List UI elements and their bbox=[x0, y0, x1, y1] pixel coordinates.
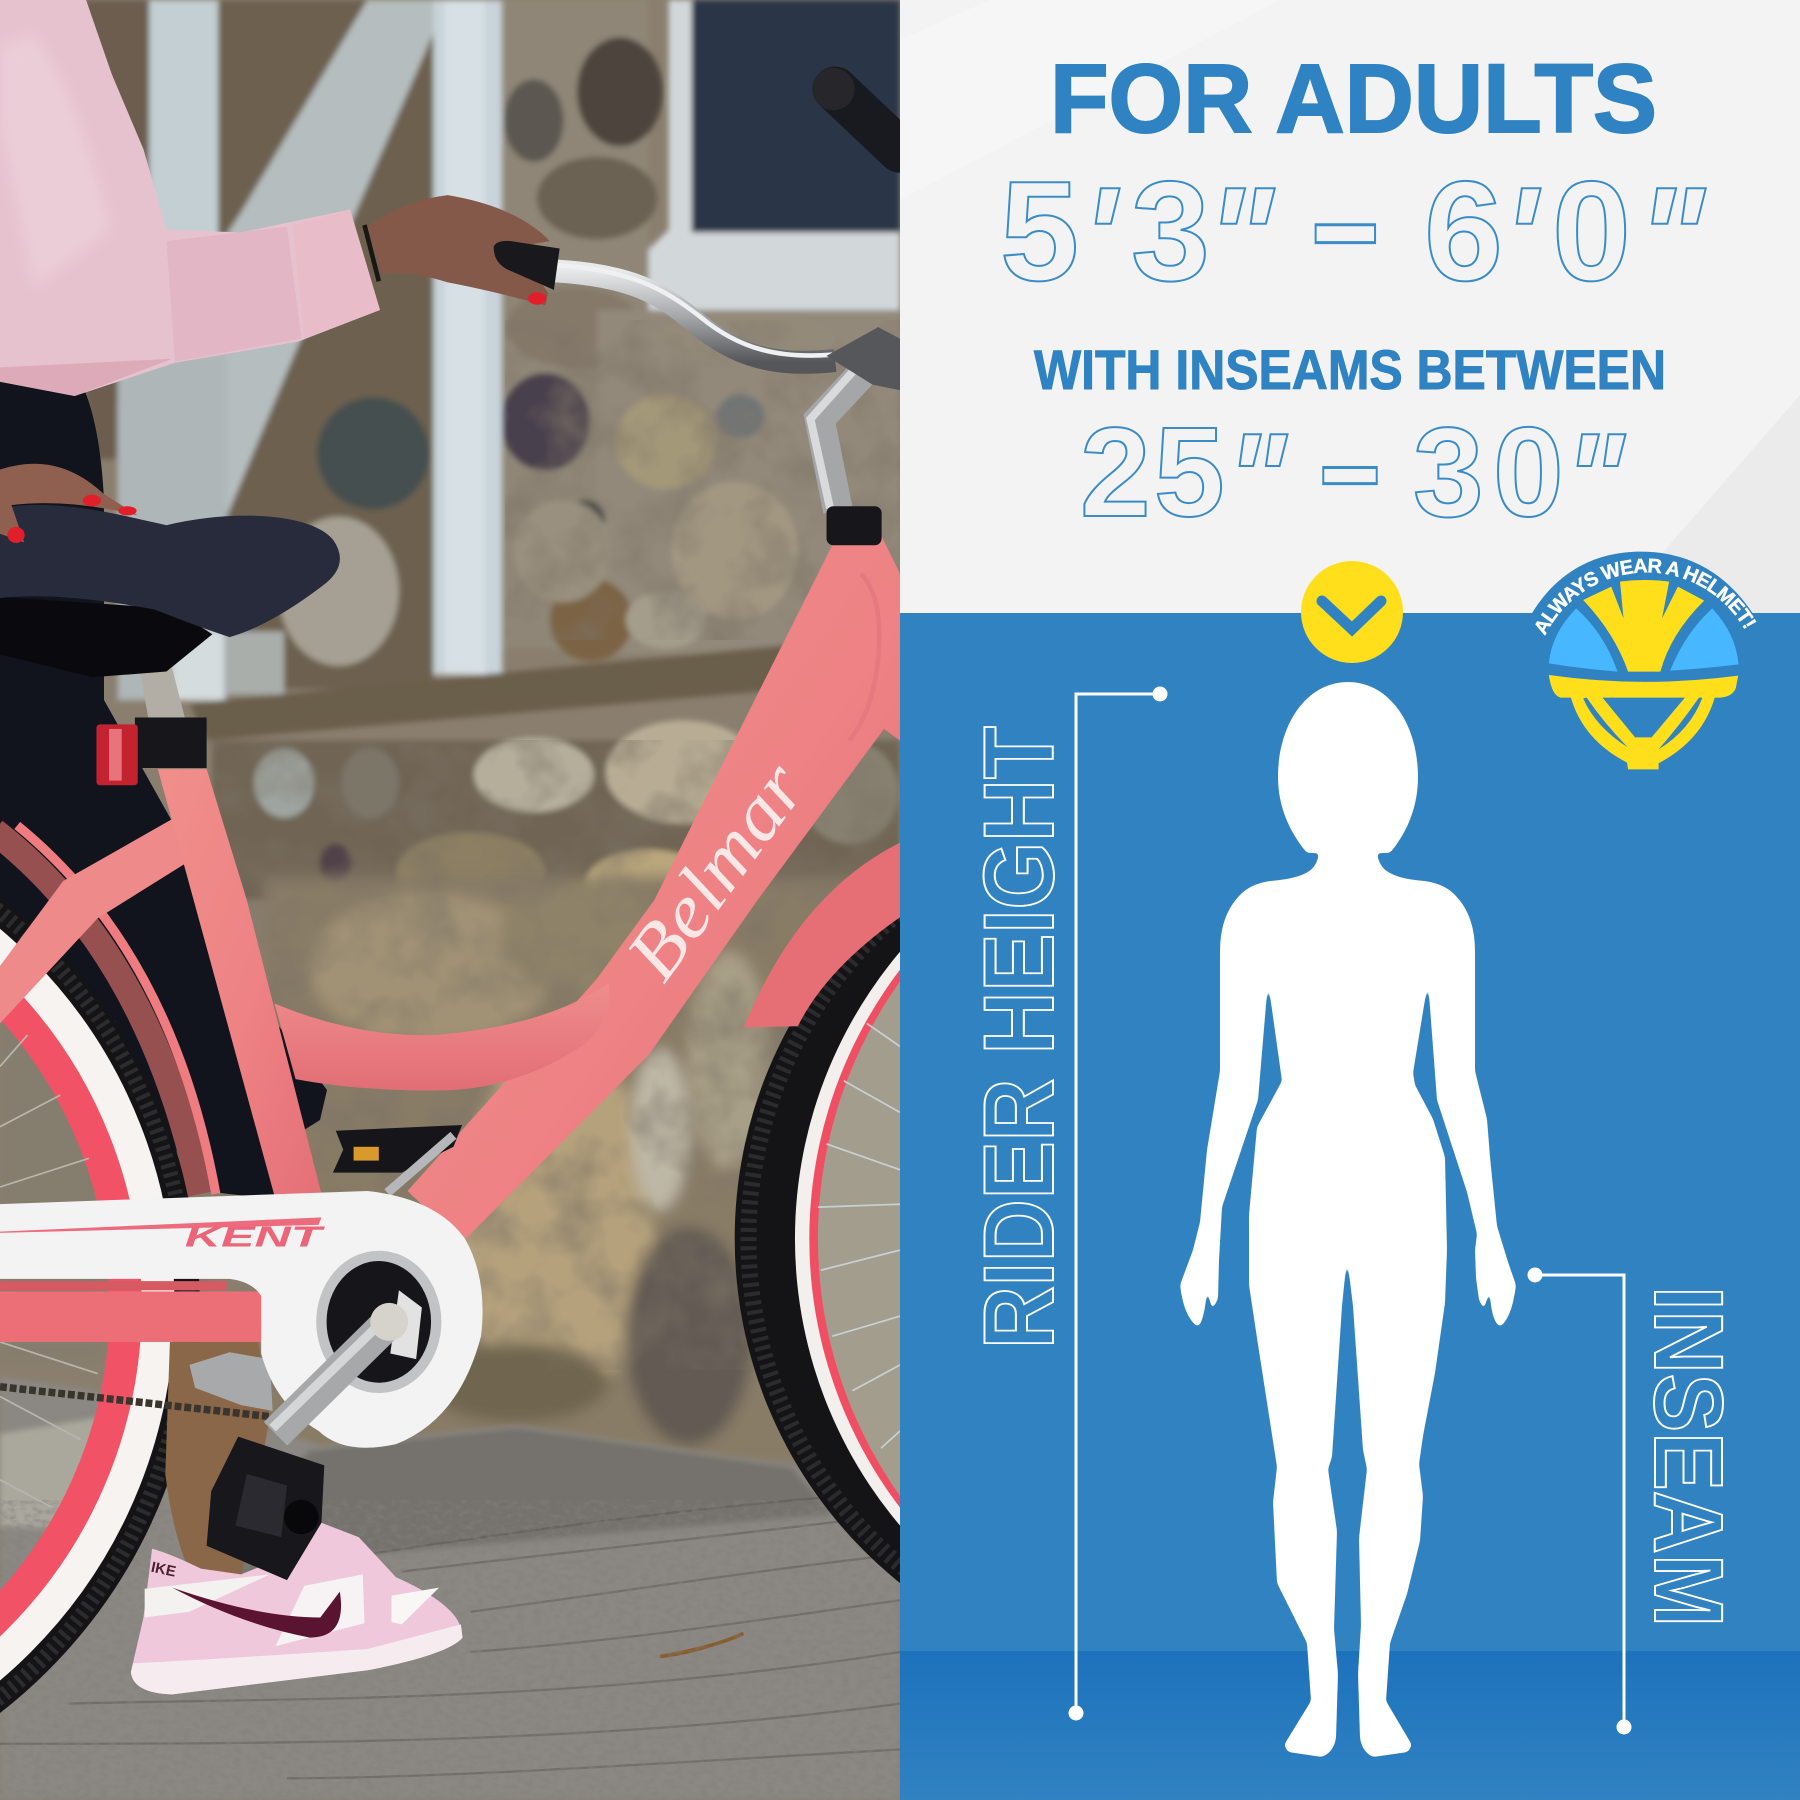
shoe bbox=[131, 1523, 463, 1694]
icon: always wear a helmet badge bbox=[1532, 552, 1756, 770]
rider height range: – bbox=[1312, 121, 1379, 321]
ankle bbox=[165, 1342, 270, 1577]
rider height bracket bbox=[1070, 688, 1166, 1719]
icon: yellow chevron badge bbox=[1301, 561, 1403, 663]
KENT logo: KENT bbox=[185, 1222, 326, 1254]
panel: blue body diagram background bbox=[900, 613, 1800, 1800]
hand on saddle bbox=[0, 464, 138, 543]
heading: for adults: FOR ADULTS bbox=[1050, 44, 1657, 153]
inseam range: 2530 bbox=[1080, 401, 1564, 543]
front pedal bbox=[207, 1437, 324, 1580]
panel: sizing information background bbox=[900, 0, 1800, 613]
pavement bbox=[0, 1376, 900, 1800]
inseam bracket bbox=[1529, 1269, 1630, 1733]
figure: woman silhouette bbox=[1180, 682, 1516, 1757]
step-through tube bbox=[274, 983, 610, 1091]
saddle bbox=[0, 505, 340, 677]
inseam range: – bbox=[1320, 373, 1380, 554]
icon: always wear a helmet badge: ALWAYS WEAR A HELMET! bbox=[1535, 558, 1756, 636]
leggings bbox=[0, 380, 327, 1200]
handlebar and stem bbox=[494, 68, 900, 545]
crank arm bbox=[273, 1303, 408, 1434]
rider height range: '"'" bbox=[1082, 158, 1706, 317]
pink sweatshirt bbox=[0, 0, 380, 396]
rider height range: 5360 bbox=[1000, 152, 1631, 311]
hand on handlebar bbox=[364, 195, 550, 305]
bicycle frame bbox=[0, 535, 900, 1342]
seat tube and rear tube bbox=[0, 769, 321, 1200]
label: rider height: RIDER HEIGHT bbox=[963, 726, 1074, 1349]
photo: woman with pink bicycle bbox=[0, 0, 900, 1800]
logo: Belmar script: Belmar bbox=[610, 747, 822, 995]
rear fender bbox=[0, 825, 216, 1194]
label: inseam: INSEAM bbox=[1634, 1286, 1743, 1627]
rear pedal bbox=[333, 1125, 462, 1193]
rear wheel bbox=[0, 903, 200, 1713]
background: stone wall and window bbox=[0, 0, 907, 1800]
inseam range: "" bbox=[1226, 407, 1626, 549]
chrome ring bbox=[321, 1256, 436, 1388]
inseam range bbox=[1080, 373, 1626, 554]
shoe: IKE bbox=[150, 1559, 177, 1581]
chain and sprocket bbox=[0, 1352, 273, 1417]
seat post, clamp and reflector bbox=[96, 669, 207, 785]
subheading: with inseams between: WITH INSEAMS BETWEEN bbox=[1034, 338, 1666, 401]
down tube and head tube bbox=[408, 535, 900, 1243]
chain stay bbox=[0, 1291, 261, 1342]
front fender bbox=[744, 843, 900, 1027]
front wheel bbox=[734, 917, 900, 1583]
white chain guard bbox=[0, 1191, 483, 1448]
